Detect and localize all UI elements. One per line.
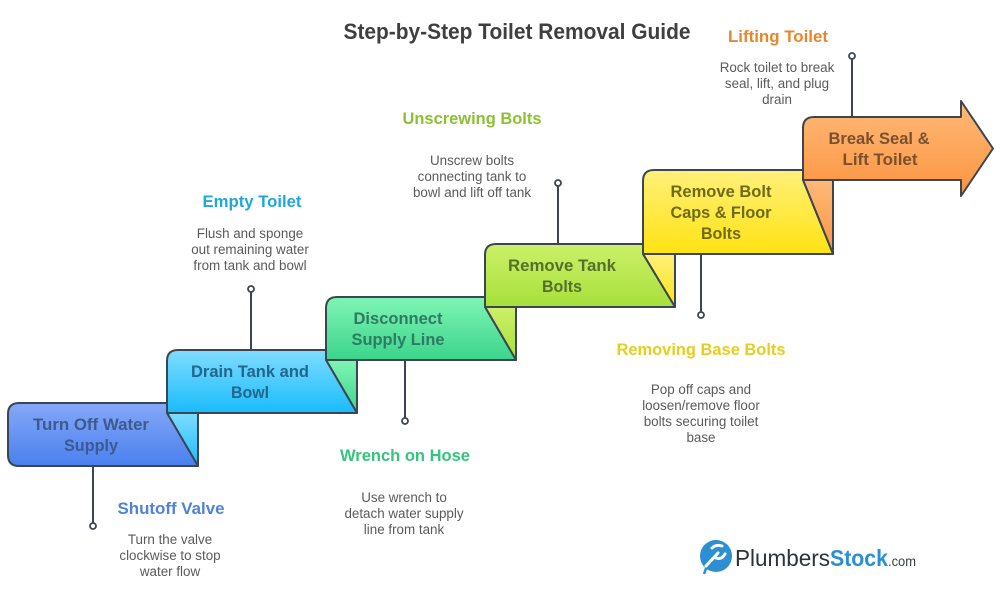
step 2: drain tank and bowl: Drain Tank and (191, 362, 309, 381)
label: lifting toilet: seal, lift, and plug (725, 76, 829, 91)
step 5: remove bolt caps: Bolts (701, 224, 741, 243)
connector: removing base bolts (698, 254, 704, 318)
label: removing base bolts: loosen/remove floor (642, 398, 760, 413)
logo: PlumbersStock: Stock (830, 545, 888, 571)
label: unscrewing bolts: Unscrewing Bolts (402, 109, 542, 128)
label: unscrewing bolts (402, 109, 542, 200)
connector: lifting toilet (849, 53, 855, 117)
step 5: remove bolt caps: Remove Bolt (670, 182, 772, 201)
label: unscrewing bolts: bowl and lift off tank (413, 185, 531, 200)
step 4: remove tank bolts: Bolts (542, 277, 582, 296)
fold: step 1 to 2 (167, 413, 198, 466)
step 4: remove tank bolts: Remove Tank (508, 256, 617, 275)
label: shutoff valve (118, 499, 224, 579)
icon: pipe wrench badge (700, 540, 732, 574)
label: lifting toilet (720, 27, 835, 107)
title: Step-by-Step Toilet Removal Guide (344, 19, 690, 44)
label: removing base bolts: Removing Base Bolts (616, 340, 786, 359)
fold: step 4 to 5 (643, 254, 675, 307)
label: wrench on hose: line from tank (364, 522, 444, 537)
connector: empty toilet (248, 286, 254, 350)
step 5: remove bolt caps (643, 170, 833, 254)
label: shutoff valve: clockwise to stop (119, 548, 221, 563)
logo: PlumbersStock: .com (888, 553, 916, 569)
label: shutoff valve: water flow (139, 564, 200, 579)
step 5: remove bolt caps: Caps & Floor (670, 203, 772, 222)
step 1: turn off water supply (8, 403, 198, 466)
label: wrench on hose: Wrench on Hose (340, 446, 470, 465)
step 6: break seal arrow: Lift Toilet (842, 150, 918, 169)
step 2: drain tank and bowl: Bowl (231, 383, 269, 402)
step 3: disconnect supply line: Disconnect (354, 309, 443, 328)
label: unscrewing bolts: Unscrew bolts (430, 153, 514, 168)
label: empty toilet: Flush and sponge (197, 226, 303, 241)
step 3: disconnect supply line: Supply Line (352, 330, 444, 349)
step 1: turn off water supply: Turn Off Water (33, 415, 149, 434)
connector: shutoff valve (90, 466, 96, 529)
label: shutoff valve: Turn the valve (128, 532, 212, 547)
label: lifting toilet: Lifting Toilet (728, 27, 828, 46)
connector: unscrewing bolts (555, 180, 561, 244)
step 6: break seal arrow (803, 101, 993, 254)
label: unscrewing bolts: connecting tank to (418, 169, 526, 184)
step 4: remove tank bolts (485, 244, 675, 307)
connector: wrench on hose (402, 360, 408, 424)
label: removing base bolts (616, 340, 786, 445)
label: shutoff valve: Shutoff Valve (118, 499, 224, 518)
label: removing base bolts: Pop off caps and (651, 382, 751, 397)
step 2: drain tank and bowl (167, 350, 357, 413)
label: empty toilet (191, 192, 309, 273)
label: lifting toilet: drain (762, 92, 792, 107)
step 3: disconnect supply line (326, 297, 516, 360)
logo: PlumbersStock (700, 540, 916, 574)
label: wrench on hose: Use wrench to (361, 490, 447, 505)
step 1: turn off water supply: Supply (64, 436, 119, 455)
label: empty toilet: from tank and bowl (193, 258, 307, 273)
label: lifting toilet: Rock toilet to break (720, 60, 835, 75)
label: wrench on hose (340, 446, 470, 537)
label: removing base bolts: base (686, 430, 716, 445)
logo: PlumbersStock: Plumbers (735, 545, 830, 571)
fold: step 3 to 4 (485, 307, 516, 360)
label: empty toilet: out remaining water (191, 242, 309, 257)
step 6: break seal arrow: Break Seal & (828, 129, 930, 148)
fold: step 2 to 3 (326, 360, 357, 413)
label: wrench on hose: detach water supply (344, 506, 464, 521)
label: removing base bolts: bolts securing toilet (644, 414, 759, 429)
label: empty toilet: Empty Toilet (202, 192, 302, 211)
